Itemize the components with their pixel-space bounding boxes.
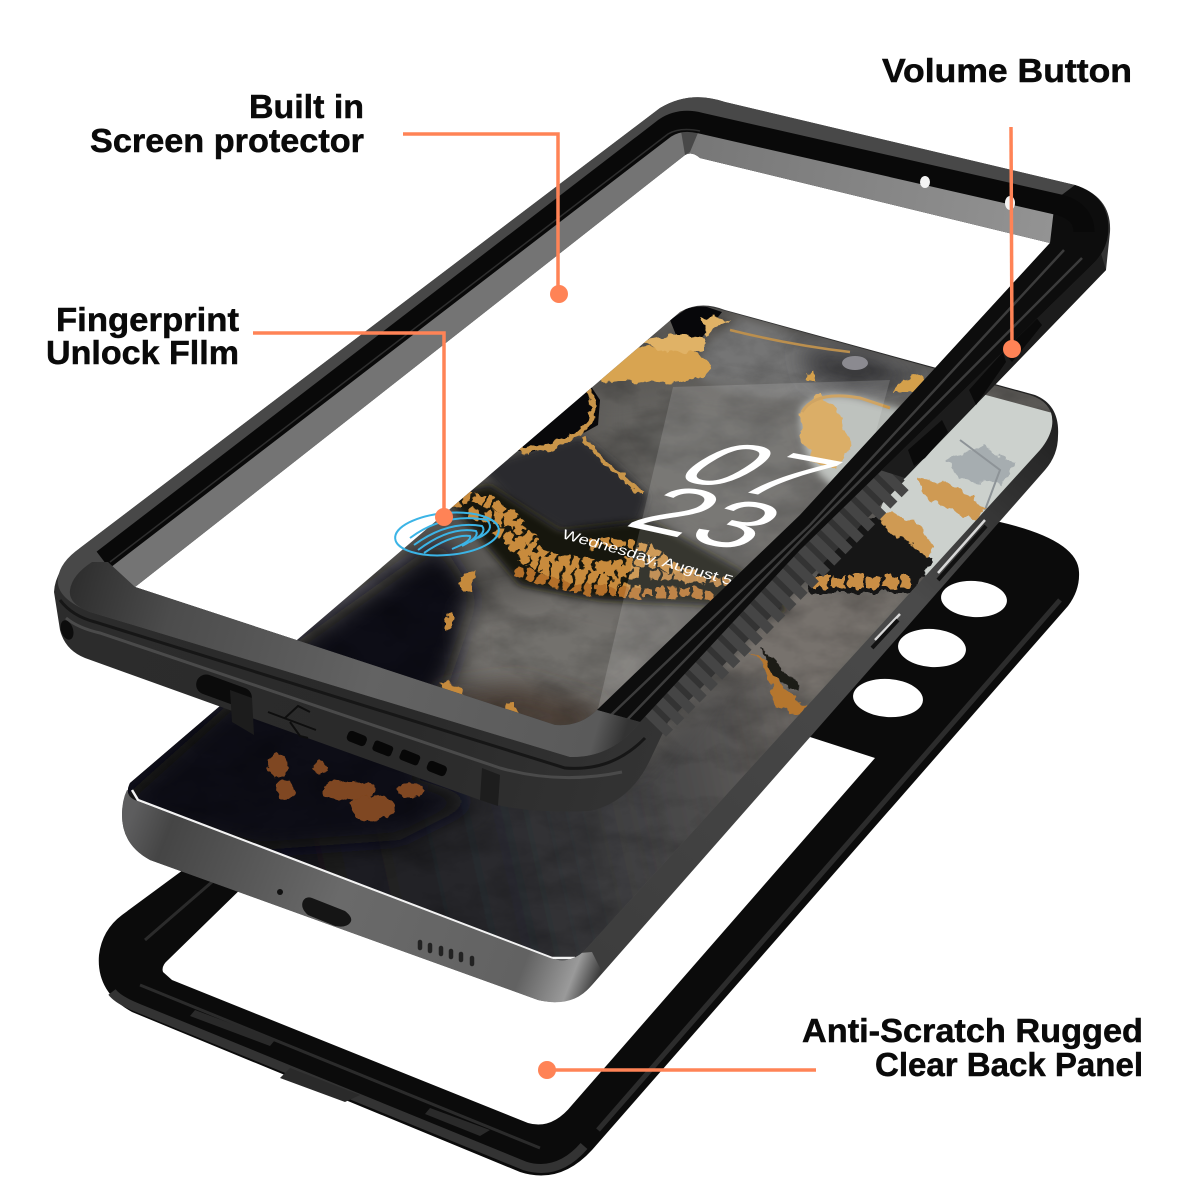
leader dot [538,1061,556,1079]
clock hour 07: 07 [649,429,867,512]
grip ribs [651,473,896,722]
speaker grille [420,942,472,964]
front frame with built-in screen protector [54,97,1110,812]
dark bed under flakes [445,485,790,612]
leader line [403,134,558,294]
microphone hole [277,889,283,895]
back frame lower grey edge [112,992,584,1168]
callout: anti-scratch back panel [538,1012,1143,1083]
wallpaper base [128,307,1052,960]
screen edge highlight [132,790,575,958]
gold flake band [450,498,760,605]
callout: fingerprint unlock film [46,301,453,526]
lower-left black marble [110,540,480,850]
USB port [302,897,351,927]
orange flakes under frame [268,753,424,821]
top gold rim [640,315,730,352]
phone bottom edge [122,790,602,1002]
port plug tab [230,690,254,735]
bottom wall panel [480,768,500,806]
right black marble [805,512,932,592]
phone screen marble wallpaper [128,306,1052,960]
dark ink clouds [800,345,920,392]
leader line [253,333,444,517]
side wall button panel [880,250,1106,478]
phone [122,306,1058,1002]
label: Unlock Fllm [46,334,239,371]
leader line [1011,127,1012,349]
clock minute 23: 23 [607,470,807,565]
frame top face base [58,97,1108,757]
lower dark marble [128,580,922,960]
top gold patch [588,345,712,384]
black rounded stripe on frame [103,121,1084,560]
speaker vents [345,730,448,777]
central grey cloud [465,590,680,712]
gold patch lower [752,652,808,716]
label [90,88,364,159]
USB symbol [268,706,316,738]
label [802,1012,1143,1083]
back clear panel frame [99,522,1079,1176]
gold vein right [878,478,985,555]
upper dark slate [478,436,648,535]
leader line [547,1068,816,1072]
charging port opening [193,672,255,710]
volume buttons [908,316,1042,466]
upper black blob [518,388,600,452]
grey glass band at top [685,128,1065,243]
back frame black body [99,522,1079,1176]
label: Anti-Scratch Rugged [802,1012,1143,1049]
bottom grey face [70,562,640,757]
right light marble [881,395,1052,577]
marble mottling [304,308,1050,938]
side wall vent [58,619,76,641]
fingerprint icon [393,509,501,559]
blue-grey veins [945,445,1015,485]
callout: built in screen protector [90,88,568,303]
date line: Wednesday, August 5th [560,527,750,593]
label: Volume Button [882,52,1132,89]
light blob [795,390,902,486]
clip details on back frame [190,1010,490,1136]
right face highlight strips [610,250,1082,722]
small gold specks [440,570,515,716]
upper grey marble [700,318,950,400]
camera cutouts [852,579,1008,719]
gold ring around blob [800,395,850,470]
label [46,301,239,371]
rib band base [650,470,894,718]
phone body [122,305,1058,1002]
label: Built in [249,88,364,125]
thin line in black stripe [110,130,700,562]
centre grey panel [623,385,773,429]
label: Clear Back Panel [875,1046,1143,1083]
label: Screen protector [90,122,364,159]
label: Fingerprint [56,301,239,338]
front camera [842,356,868,370]
frame side wall [54,97,1110,812]
brown sediment [462,674,600,725]
back frame right grey edge [598,600,1060,1130]
gold flakes right lower [815,576,910,588]
leader dot [1003,340,1021,358]
bottom face dark groove [60,600,645,768]
gold dots near top [805,372,925,392]
blob rim gold [520,385,593,451]
phone side buttons [875,520,985,640]
glass reflection wedge [597,380,890,720]
right black face [597,185,1108,722]
leader dot [435,508,453,526]
callout: volume button [882,52,1132,358]
left grey glass band [105,125,685,587]
leader dot [550,285,568,303]
side wall light line [66,618,622,778]
sim pin holes on protector [920,176,1015,210]
lower right grey [720,590,905,700]
back frame inner ledge [140,875,540,1148]
top black corner [670,306,722,338]
